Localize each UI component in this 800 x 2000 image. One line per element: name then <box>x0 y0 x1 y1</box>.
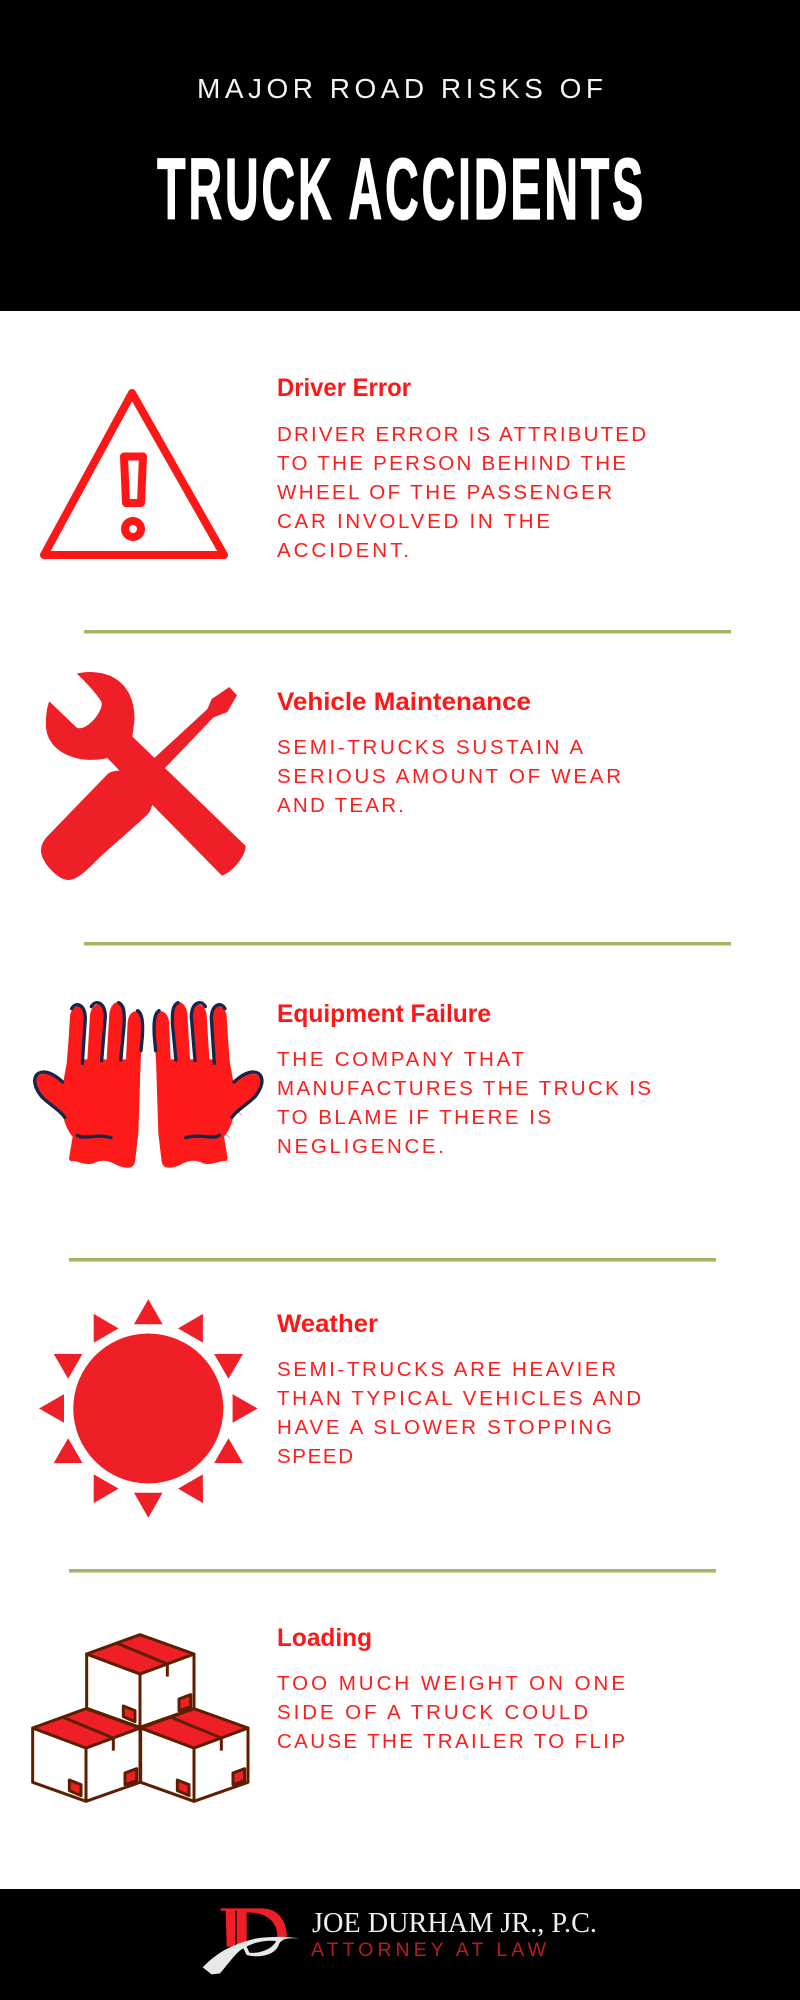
text: loading: SIDE OF A TRUCK COULD <box>277 1701 588 1724</box>
text: loading <box>277 1624 625 1753</box>
text: weather: THAN TYPICAL VEHICLES AND <box>277 1387 641 1410</box>
logo: firm name: JOE DURHAM JR., P.C. <box>312 1908 597 1939</box>
text: vehicle maintenance: Vehicle Maintenance <box>277 688 531 716</box>
text: weather <box>277 1310 641 1468</box>
text: equipment failure: TO BLAME IF THERE IS <box>277 1106 551 1129</box>
right glove <box>153 1002 263 1168</box>
text: loading: CAUSE THE TRAILER TO FLIP <box>277 1730 625 1753</box>
text: vehicle maintenance: SEMI-TRUCKS SUSTAIN A <box>277 736 583 759</box>
logo: JD monogram <box>203 1908 299 1974</box>
header band <box>0 0 800 311</box>
text: driver error: Driver Error <box>277 374 411 402</box>
icon: stacked boxes <box>33 1635 248 1801</box>
text: vehicle maintenance: SERIOUS AMOUNT OF WEAR <box>277 765 621 788</box>
text: driver error <box>277 374 646 562</box>
text: loading: Loading <box>277 1624 372 1652</box>
icon: gloves <box>34 1002 263 1168</box>
left box <box>33 1709 140 1801</box>
text: driver error: DRIVER ERROR IS ATTRIBUTED <box>277 423 646 446</box>
text: weather: SPEED <box>277 1445 353 1468</box>
logo: tagline: ATTORNEY AT LAW <box>311 1939 547 1961</box>
text: driver error: ACCIDENT. <box>277 539 409 562</box>
text: weather: SEMI-TRUCKS ARE HEAVIER <box>277 1358 616 1381</box>
icon: sun <box>39 1299 258 1518</box>
subtitle: MAJOR ROAD RISKS OF <box>197 73 603 104</box>
text: driver error: TO THE PERSON BEHIND THE <box>277 452 626 475</box>
icon: wrench and screwdriver <box>41 672 246 880</box>
text: equipment failure: MANUFACTURES THE TRUCK IS <box>277 1077 651 1100</box>
text: weather: Weather <box>277 1310 378 1338</box>
text: vehicle maintenance: AND TEAR. <box>277 794 404 817</box>
text: loading: TOO MUCH WEIGHT ON ONE <box>277 1672 625 1695</box>
text: driver error: WHEEL OF THE PASSENGER <box>277 481 612 504</box>
icon: warning triangle <box>44 393 224 555</box>
text: equipment failure: NEGLIGENCE. <box>277 1135 444 1158</box>
footer band <box>0 1889 800 2000</box>
left glove <box>34 1002 143 1168</box>
text: weather: HAVE A SLOWER STOPPING <box>277 1416 612 1439</box>
text: driver error: CAR INVOLVED IN THE <box>277 510 550 533</box>
text: equipment failure <box>277 1000 651 1158</box>
top box <box>87 1635 194 1727</box>
right box <box>141 1709 248 1801</box>
text: equipment failure: Equipment Failure <box>277 1000 491 1028</box>
text: vehicle maintenance <box>277 688 621 817</box>
text: equipment failure: THE COMPANY THAT <box>277 1048 524 1071</box>
